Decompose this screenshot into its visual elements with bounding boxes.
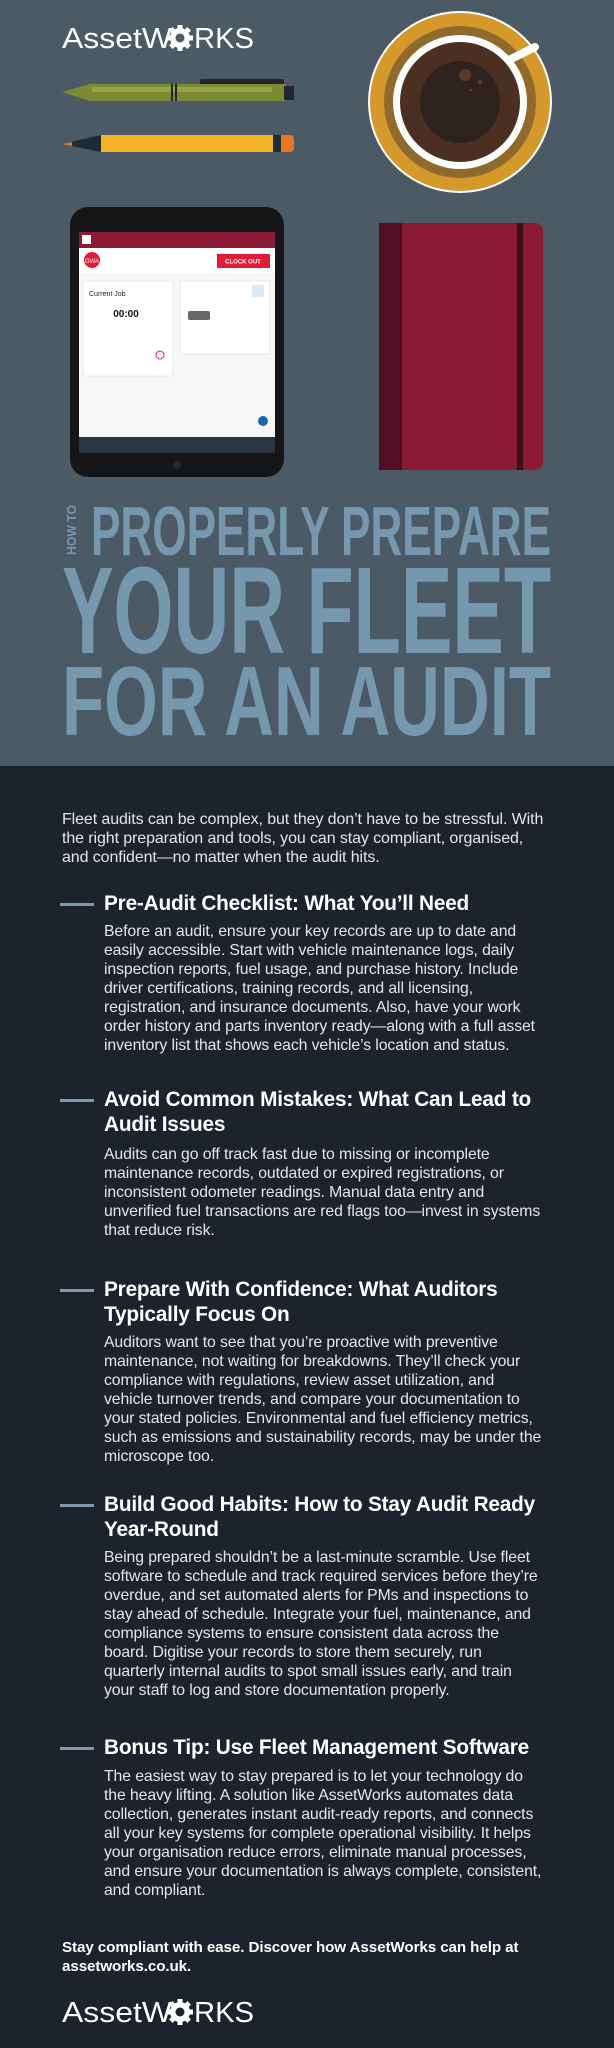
heading 1: Pre-Audit Checklist: What You’ll Need [104,892,469,915]
body 4: overdue, and set automated alerts for PMs and inspections to [104,1587,528,1604]
icon: notebook [379,223,543,470]
body 3: compliance with regulations, review asset utilization, and [104,1372,494,1389]
body 1: Before an audit, ensure your key records are up to date and [104,923,516,940]
icon: tablet: GWA [85,259,99,265]
body 5: and ensure your documentation is always complete, consistent, [104,1863,541,1880]
body 1: driver certifications, training records, and all licensing, [104,980,473,997]
body 2: maintenance records, outdated or expired registrations, or [104,1165,504,1182]
heading 2: Avoid Common Mistakes: What Can Lead to [104,1088,531,1111]
body 2: unverified fuel transactions are red flags too—invest in systems [104,1203,540,1220]
body 3: maintenance, not waiting for breakdowns. They’ll check your [104,1353,520,1370]
body 3 [104,1334,541,1465]
logo top: RKS [194,23,254,55]
heading 4: Year-Round [104,1518,219,1541]
body 4: board. Digitise your records to store them securely, run [104,1644,482,1661]
section 4 [60,1493,538,1699]
heading 4 [104,1493,536,1541]
body 4: your staff to log and store documentation properly. [104,1682,450,1699]
icon: tablet: 00:00 [113,309,139,320]
body 2 [104,1146,540,1239]
body 4: stay ahead of schedule. Integrate your fuel, maintenance, and [104,1606,531,1623]
body 1: registration, and insurance documents. Also, have your work [104,999,520,1016]
call to action: Stay compliant with ease. Discover how AssetWorks can help at [62,1939,518,1956]
icon: tablet [70,207,284,477]
logo bottom: AssetW [62,1997,173,2029]
body 2: inconsistent odometer readings. Manual data entry and [104,1184,484,1201]
logo bottom: RKS [194,1997,254,2029]
body 3: your stated policies. Environmental and fuel efficiency metrics, [104,1410,533,1427]
body 3: Auditors want to see that you’re proactive with preventive [104,1334,498,1351]
body 5: The easiest way to stay prepared is to let your technology do [104,1768,523,1785]
body 4: software to schedule and track required services before they’re [104,1568,538,1585]
intro text: and confident—no matter when the audit hits. [62,849,380,866]
title: HOW TO [64,505,79,555]
body 4: Being prepared shouldn’t be a last-minute scramble. Use fleet [104,1549,530,1566]
body 5: your organisation reduce errors, eliminate manual processes, [104,1844,526,1861]
heading 3: Prepare With Confidence: What Auditors [104,1278,498,1301]
call to action [62,1939,518,1975]
logo top: AssetW [62,23,173,55]
body 3: vehicle turnover trends, and compare your documentation to [104,1391,520,1408]
body 4 [104,1549,538,1699]
logo bottom [62,1997,254,2029]
intro text: the right preparation and tools, you can stay compliant, organised, [62,830,523,847]
body 4: quarterly internal audits to spot small issues early, and train [104,1663,512,1680]
body 5: collection, generates instant audit-ready reports, and connects [104,1806,533,1823]
icon: coffee cup [368,11,552,193]
body 1: easily accessible. Start with vehicle maintenance logs, daily [104,942,514,959]
heading 4: Build Good Habits: How to Stay Audit Ready [104,1493,535,1516]
section 3 [60,1278,541,1465]
body 5: all your key systems for complete operational visibility. It helps [104,1825,531,1842]
body 1: inventory list that shows each vehicle’s location and status. [104,1037,509,1054]
body 3: such as emissions and sustainability records, may be under the [104,1429,541,1446]
heading 2: Audit Issues [104,1113,225,1136]
logo top [62,23,254,55]
body 1: inspection reports, fuel usage, and purchase history. Include [104,961,518,978]
body 2: Audits can go off track fast due to missing or incomplete [104,1146,490,1163]
heading 5: Bonus Tip: Use Fleet Management Software [104,1736,529,1759]
section 5 [60,1736,541,1899]
title [62,492,551,756]
body 1: order history and parts inventory ready—along with a full asset [104,1018,535,1035]
heading 3: Typically Focus On [104,1303,290,1326]
heading 3 [104,1278,498,1326]
body 5: the heavy lifting. A solution like AssetWorks automates data [104,1787,513,1804]
icon: pen [62,79,294,101]
header panel [0,0,614,766]
body 4: compliance systems to ensure consistent data across the [104,1625,499,1642]
intro text [62,811,543,866]
body 5: and compliant. [104,1882,205,1899]
body 3: microscope too. [104,1448,214,1465]
body 2: that reduce risk. [104,1222,215,1239]
body 1 [104,923,535,1054]
intro text: Fleet audits can be complex, but they don’t have to be stressful. With [62,811,543,828]
heading 2 [104,1088,531,1136]
icon: tablet: Current Job [89,291,126,298]
section 1 [60,892,535,1054]
icon: pencil [62,135,294,152]
icon: tablet: CLOCK OUT [225,260,261,266]
section 2 [60,1088,540,1239]
call to action: assetworks.co.uk. [62,1958,191,1975]
body 5 [104,1768,541,1899]
